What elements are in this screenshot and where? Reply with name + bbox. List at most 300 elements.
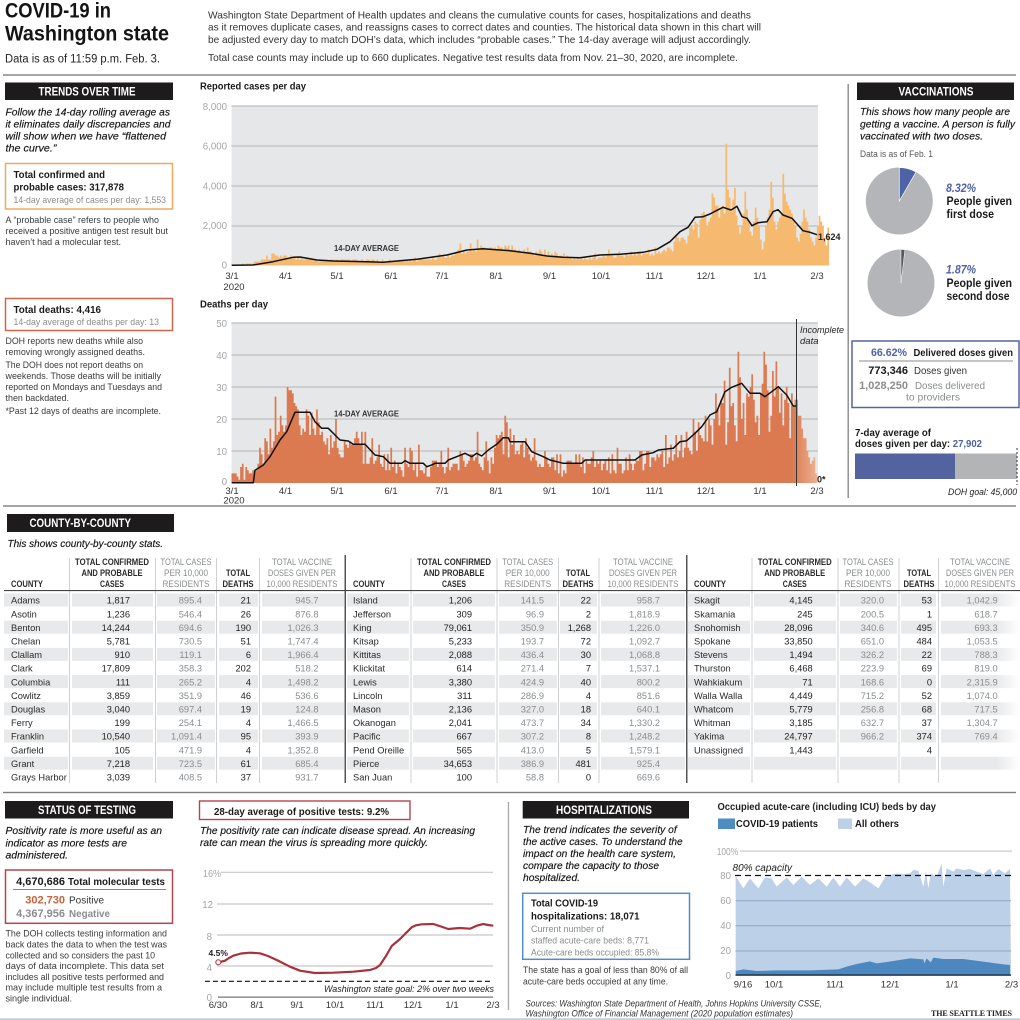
rows: 100 — [456, 772, 472, 782]
table header: TOTAL VACCINE — [950, 557, 1010, 567]
table header: CASES — [100, 579, 124, 589]
x axis: deaths: 12/1 — [697, 486, 715, 497]
credit: The Seattle Times: THE SEATTLE TIMES — [931, 1009, 1013, 1018]
rows: 119.1 — [179, 650, 202, 660]
x axis: positivity: 10/1 — [326, 1000, 344, 1011]
rows: 340.6 — [861, 623, 884, 633]
table header: COUNTY — [694, 579, 727, 589]
intro text: Washington State Department of Health updates and cleans the cumulative counts for cases, hospitalizations and deaths — [208, 10, 751, 22]
x axis: beds: 9/16 — [734, 980, 752, 990]
bar: doses vs goal — [855, 448, 1017, 485]
rows — [11, 596, 318, 782]
heading: county-by-county: COUNTY-BY-COUNTY — [30, 518, 131, 530]
rows: 697.4 — [179, 704, 202, 714]
bars: daily deaths — [232, 352, 817, 483]
rows: 424.9 — [521, 677, 544, 687]
callout: total cases: 14-day average of cases per day: 1,553 — [14, 195, 166, 206]
trend line: 14-day average deaths — [232, 383, 797, 483]
rows: 1,206 — [449, 596, 472, 606]
y axis: positivity — [202, 869, 221, 1004]
intro text: Total case counts may include up to 660 duplicates. Negative test results data from Nov. 21–30, 2020, are incomplete. — [208, 53, 738, 64]
intro: vaccinations — [860, 106, 1016, 142]
x axis: cases: 8/1 — [489, 271, 503, 282]
rows: 1,817 — [107, 596, 130, 606]
panel: trends over time — [5, 82, 173, 417]
intro: vaccinations: vaccinated with two doses. — [860, 130, 983, 142]
callout: 28-day average: 28-day average of positive tests: 9.2% — [214, 806, 390, 818]
intro: positivity rate: The positivity rate can indicate disease spread. An increasing — [200, 825, 475, 837]
table header — [694, 557, 1016, 589]
x axis: deaths — [223, 486, 824, 506]
rows: 124.8 — [295, 704, 318, 714]
rows: 28,096 — [784, 623, 813, 633]
rows: Garfield — [11, 745, 44, 755]
label: 14-day average deaths: 14-DAY AVERAGE — [334, 408, 399, 418]
rows: 2 — [586, 609, 591, 619]
rows: 1,053.5 — [967, 636, 998, 646]
note: probable case: received a positive antigen test result but — [6, 226, 168, 237]
callout: total hospitalizations: Total COVID-19 — [531, 898, 598, 910]
rows: 5 — [586, 745, 591, 755]
chart: occupied beds — [717, 801, 1018, 990]
rows: Okanogan — [353, 718, 396, 728]
rows: 72 — [581, 636, 591, 646]
y axis: cases: 0 — [222, 260, 228, 272]
note: deaths reporting — [5, 336, 162, 417]
label: first dose: People given — [946, 196, 1012, 208]
y axis: cases: 6,000 — [203, 142, 228, 152]
table header: CASES — [442, 579, 466, 589]
callout: total cases — [6, 164, 172, 209]
panel: status of testing — [5, 801, 500, 1011]
heading: hospitalizations — [523, 801, 689, 818]
intro: positivity: administered. — [6, 850, 68, 862]
y axis: beds: 0 — [726, 971, 732, 982]
table header: COUNTY — [11, 579, 44, 589]
rows: 413.0 — [521, 745, 544, 755]
intro: rolling average: the curve.” — [6, 142, 57, 154]
rows: 71 — [802, 677, 813, 687]
x axis: deaths: 7/1 — [435, 486, 449, 497]
rows: 37 — [241, 772, 251, 782]
y axis: deaths — [216, 319, 228, 488]
rows: 10,540 — [102, 732, 130, 742]
rows: 386.9 — [521, 759, 544, 769]
rows: 1,236 — [107, 609, 130, 619]
label: first dose — [946, 181, 1012, 221]
rows: 481 — [575, 759, 591, 769]
rows: 1,304.7 — [967, 718, 998, 728]
rows: 6 — [246, 650, 251, 660]
rows: 327.0 — [521, 704, 544, 714]
intro: hospitalizations: the active cases. To understand the — [523, 836, 683, 848]
rows: 495 — [916, 623, 932, 633]
legend: beds: COVID-19 patients — [736, 818, 818, 830]
rows: 3,185 — [789, 718, 813, 728]
rows: 3,040 — [107, 704, 130, 714]
rows: 5,779 — [789, 704, 813, 714]
table header: TOTAL VACCINE — [613, 557, 673, 567]
bars: daily cases — [232, 144, 829, 266]
rows: 393.9 — [295, 732, 318, 742]
table header: RESIDENTS — [162, 579, 210, 589]
callout: doses delivered and given: Doses delivered — [915, 380, 985, 392]
rows: Grays Harbor — [11, 772, 67, 782]
rows: 311 — [457, 691, 472, 701]
label: 7-day average doses — [855, 427, 982, 450]
rows: 876.8 — [295, 609, 318, 619]
x axis: cases: 12/1 — [697, 271, 715, 282]
table header: PER 10,000 — [164, 568, 208, 578]
rows: Snohomish — [694, 623, 741, 633]
label: second dose: People given — [946, 278, 1012, 290]
rows: 69 — [922, 664, 932, 674]
rows: 14,244 — [102, 623, 130, 633]
rows: Yakima — [694, 732, 725, 742]
rows: 1,026.3 — [287, 623, 318, 633]
rows: 22 — [922, 650, 932, 660]
rows: 769.4 — [974, 732, 998, 742]
rows: 851.6 — [637, 691, 660, 701]
rows: Whatcom — [694, 704, 734, 714]
rows: 471.9 — [179, 745, 202, 755]
table header: TOTAL CONFIRMED — [417, 557, 491, 567]
table header: TOTAL VACCINE — [272, 557, 332, 567]
intro text — [208, 10, 761, 64]
callout: doses delivered and given: 1,028,250 — [859, 380, 908, 392]
rows: 2,136 — [449, 704, 472, 714]
rows: 1,226.0 — [629, 623, 660, 633]
y axis: positivity: 8 — [207, 932, 212, 943]
date note: vaccinations: Data is as of Feb. 1 — [860, 149, 933, 159]
x axis: cases: 4/1 — [279, 271, 292, 282]
rows: 4,145 — [789, 596, 813, 606]
rows: 1,579.1 — [629, 745, 660, 755]
rows: 800.2 — [637, 677, 660, 687]
intro: rolling average: Follow the 14-day rolling average as — [6, 106, 171, 118]
rows: 2,041 — [449, 718, 472, 728]
chart title: deaths: Deaths per day — [200, 298, 268, 310]
intro text: be adjusted every day to match DOH’s data, which includes “probable cases.” The 14-day average will adjust accordingly. — [208, 35, 751, 46]
title: Washington state — [5, 22, 169, 46]
note: deaths reporting: The DOH does not report deaths on — [6, 360, 143, 371]
x axis: cases: 10/1 — [592, 271, 610, 282]
table header — [353, 557, 678, 589]
y axis: cases — [203, 102, 228, 272]
start marker: 4.5% — [208, 948, 228, 965]
heading: status of testing: STATUS OF TESTING — [38, 805, 136, 817]
legend: beds — [718, 818, 899, 830]
rows: 651.0 — [861, 636, 884, 646]
rows: 1,248.2 — [629, 732, 660, 742]
table header: DOSES GIVEN PER — [609, 568, 677, 578]
y axis: positivity: 0 — [207, 993, 213, 1004]
rows: 1 — [927, 609, 932, 619]
callout: total deaths — [6, 298, 172, 330]
rows: 286.9 — [521, 691, 544, 701]
rows: 18 — [581, 704, 591, 714]
callout: molecular tests: Total molecular tests — [68, 876, 165, 888]
x axis: beds: 2/3 — [1005, 980, 1018, 990]
x axis: deaths: 10/1 — [592, 486, 610, 497]
rows: 1,092.7 — [629, 636, 660, 646]
note: deaths reporting: *Past 12 days of deaths are incomplete. — [6, 406, 161, 417]
x axis: deaths: 9/1 — [543, 486, 556, 497]
table header: PER 10,000 — [506, 568, 550, 578]
rows: King — [353, 623, 372, 633]
heading: vaccinations — [857, 82, 1014, 100]
table header: DOSES GIVEN PER — [268, 568, 336, 578]
rows: 565 — [456, 745, 472, 755]
note: test data: single individual. — [6, 994, 72, 1004]
rows: 1,443 — [789, 745, 813, 755]
x axis: cases: 1/1 — [753, 271, 767, 282]
rows: Skamania — [694, 609, 736, 619]
rows: 1,352.8 — [287, 745, 318, 755]
label: second dose: second dose — [946, 291, 1010, 303]
note: capacity goal — [523, 965, 688, 988]
rows: 34,653 — [444, 759, 472, 769]
note: capacity goal: acute-care beds occupied at any time. — [523, 976, 668, 988]
rows: Lewis — [353, 677, 377, 687]
rows: 53 — [922, 596, 932, 606]
rows: 254.1 — [179, 718, 202, 728]
rows: Walla Walla — [694, 691, 743, 701]
note: probable case: haven’t had a molecular test. — [6, 237, 121, 248]
y axis: cases: 4,000 — [203, 182, 228, 192]
intro: rolling average: it eliminates daily discrepancies and — [6, 118, 172, 130]
rows: 4,449 — [789, 691, 813, 701]
note: test data: includes all positive tests performed and — [6, 972, 164, 983]
label: first dose: 8.32% — [946, 181, 976, 195]
label: latest average 1,624: 1,624 — [818, 232, 841, 242]
rows: 34 — [581, 718, 591, 728]
heading: hospitalizations: HOSPITALIZATIONS — [556, 805, 652, 817]
callout: total deaths: 14-day average of deaths per day: 13 — [14, 317, 159, 328]
table: counties Skagit to Unassigned — [688, 557, 1020, 783]
rows: 788.3 — [974, 650, 998, 660]
panel: hospitalizations — [523, 801, 1018, 990]
intro: hospitalizations: compare the capacity to those — [523, 860, 659, 872]
table header: TOTAL CASES — [160, 557, 212, 567]
rows: Chelan — [11, 636, 40, 646]
note: test data: back dates the data to when the test was — [6, 940, 167, 950]
callout: doses delivered and given: 773,346 — [868, 365, 908, 377]
rows: 265.2 — [179, 677, 202, 687]
rows: 30 — [581, 650, 591, 660]
rows: Ferry — [11, 718, 33, 728]
rows: 202 — [235, 664, 251, 674]
table header: AND PROBABLE — [764, 568, 825, 578]
rows: 96.9 — [526, 609, 544, 619]
sources — [526, 998, 822, 1018]
rows: Island — [353, 596, 378, 606]
table header: TOTAL — [566, 568, 590, 578]
rows: 105 — [114, 745, 130, 755]
y axis: deaths: 50 — [216, 319, 228, 330]
rows: 958.7 — [637, 596, 660, 606]
rows: Pacific — [353, 732, 381, 742]
y axis: beds: 80 — [720, 871, 732, 882]
rows: 4 — [246, 677, 251, 687]
note: deaths reporting: then backdated. — [6, 393, 69, 404]
rows: 715.2 — [861, 691, 884, 701]
y axis: deaths: 0 — [222, 477, 228, 488]
rows: 5,781 — [107, 636, 130, 646]
y axis: cases: 2,000 — [203, 221, 228, 232]
rows: 326.2 — [861, 650, 884, 660]
y axis: deaths: 40 — [216, 351, 228, 362]
rows: 484 — [916, 636, 932, 646]
table header: PER 10,000 — [846, 568, 890, 578]
rows: Skagit — [694, 596, 720, 606]
rows: 307.2 — [521, 732, 544, 742]
rows: Clark — [11, 664, 33, 674]
rows: Franklin — [11, 732, 44, 742]
label: 7-day average doses: 7-day average of — [855, 427, 931, 439]
rows: 141.5 — [521, 596, 544, 606]
intro: rolling average: will show when we have “flattened — [6, 130, 167, 142]
rows: 350.9 — [521, 623, 544, 633]
rows: 640.1 — [637, 704, 660, 714]
note: test data: collected and so considers the past 10 — [6, 950, 155, 962]
x axis: deaths: 2020 — [223, 496, 245, 506]
rows: 925.4 — [637, 759, 660, 769]
table header: TOTAL CONFIRMED — [75, 557, 149, 567]
table header: RESIDENTS — [504, 579, 551, 589]
x axis: cases — [223, 271, 824, 293]
x axis: deaths: 2/3 — [810, 486, 824, 497]
note: test data: days of data incomplete. This data set — [6, 961, 164, 972]
rows: 0 — [927, 677, 932, 687]
rows: 37 — [922, 718, 932, 728]
x axis: deaths: 6/1 — [384, 486, 398, 497]
callout: molecular tests — [6, 870, 172, 923]
x axis: positivity: 6/30 — [209, 1000, 227, 1011]
rows: 199 — [114, 718, 130, 728]
label: second dose: 1.87% — [946, 262, 976, 276]
rows: 4 — [586, 691, 591, 701]
area: all other patients — [736, 864, 1011, 975]
table header: RESIDENTS — [844, 579, 892, 589]
x axis: beds: 11/1 — [826, 980, 844, 990]
rows: 374 — [916, 732, 932, 742]
rows: 46 — [241, 691, 251, 701]
rows: San Juan — [353, 772, 392, 782]
rows: 473.7 — [521, 718, 544, 728]
rows: 2,088 — [449, 650, 472, 660]
note: deaths reporting: reported on Mondays and Tuesdays and — [6, 382, 162, 393]
date note: Data is as of 11:59 p.m. Feb. 3. — [5, 54, 160, 66]
callout: total hospitalizations: Current number of — [531, 924, 604, 935]
table header: DEATHS — [222, 579, 254, 589]
marker: incomplete data — [796, 319, 844, 486]
x axis: deaths: 1/1 — [753, 486, 767, 497]
callout: 28-day average — [200, 801, 410, 820]
x axis: deaths: 11/1 — [646, 486, 663, 497]
x axis: deaths: 3/1 — [225, 486, 239, 497]
rows: 1,498.2 — [287, 677, 318, 687]
trend line: 14-day average cases — [232, 206, 817, 265]
rows: Jefferson — [353, 609, 391, 619]
x axis: positivity: 1/1 — [445, 1000, 459, 1011]
rows — [353, 596, 660, 782]
note: deaths reporting: removing wrongly assigned deaths. — [6, 347, 145, 358]
table header: TOTAL — [907, 568, 931, 578]
sources: Washington Office of Financial Management (2020 population estimates) — [526, 1008, 793, 1018]
rows: 19 — [241, 704, 251, 714]
goal line: Washington state goal: 2% over two weeks — [324, 984, 494, 995]
x axis: deaths: 8/1 — [489, 486, 503, 497]
rows: 22 — [581, 596, 591, 606]
callout: total hospitalizations — [523, 893, 690, 959]
rows: 223.9 — [861, 664, 884, 674]
intro: positivity rate — [200, 825, 475, 849]
y axis: beds: 60 — [720, 896, 732, 907]
table header: 10,000 RESIDENTS — [608, 579, 678, 589]
rows: 245 — [797, 609, 813, 619]
table header: AND PROBABLE — [424, 568, 484, 578]
rows: 271.4 — [521, 664, 544, 674]
rows: 730.5 — [179, 636, 202, 646]
rows: Unassigned — [694, 745, 743, 755]
rows — [694, 596, 998, 755]
callout: doses delivered and given — [852, 341, 1019, 408]
rows: 193.7 — [521, 636, 544, 646]
rows: 168.6 — [861, 677, 884, 687]
chart: positivity rate — [202, 869, 500, 1011]
rows: Pend Oreille — [353, 745, 404, 755]
rows: 40 — [581, 677, 591, 687]
rows: 614 — [456, 664, 472, 674]
rows: Kitsap — [353, 636, 379, 646]
note: test data: The DOH collects testing information and — [6, 929, 167, 940]
rows: 723.5 — [179, 759, 202, 769]
rows: 1,537.1 — [629, 664, 660, 674]
rows: 518.2 — [295, 664, 318, 674]
rows: Grant — [11, 759, 35, 769]
y axis: positivity: 16% — [203, 869, 221, 880]
x axis: beds: 10/1 — [765, 980, 783, 990]
rows: 79,061 — [444, 623, 472, 633]
note: probable case — [6, 215, 168, 248]
rows: 1,268 — [568, 623, 591, 633]
rows: 3,039 — [107, 772, 130, 782]
rows: 68 — [922, 704, 932, 714]
y axis: positivity: 4 — [207, 963, 213, 974]
chart: deaths per day — [200, 298, 844, 506]
rows: 7 — [586, 664, 591, 674]
table header: TOTAL — [226, 568, 250, 578]
rows: 910 — [114, 650, 130, 660]
x axis: positivity: 12/1 — [404, 1000, 422, 1011]
y axis: beds — [717, 847, 738, 982]
note: capacity goal: The state has a goal of less than 80% of all — [523, 965, 688, 976]
note: deaths reporting: weekends. Those deaths will be initially — [5, 371, 161, 382]
table header: TOTAL CASES — [502, 557, 553, 567]
intro: hospitalizations: hospitalized. — [523, 872, 580, 884]
rows: 436.4 — [521, 650, 544, 660]
rows: 685.4 — [295, 759, 318, 769]
x axis: cases: 2020 — [223, 282, 245, 293]
heading: trends over time — [5, 82, 173, 100]
x axis: positivity: 9/1 — [290, 1000, 304, 1011]
label: first dose: first dose — [946, 209, 994, 221]
callout: doses delivered and given: Doses given — [914, 365, 967, 377]
callout: doses delivered and given: 66.62% — [871, 347, 907, 359]
rows: Whitman — [694, 718, 731, 728]
chart title: cases: Reported cases per day — [200, 80, 306, 92]
